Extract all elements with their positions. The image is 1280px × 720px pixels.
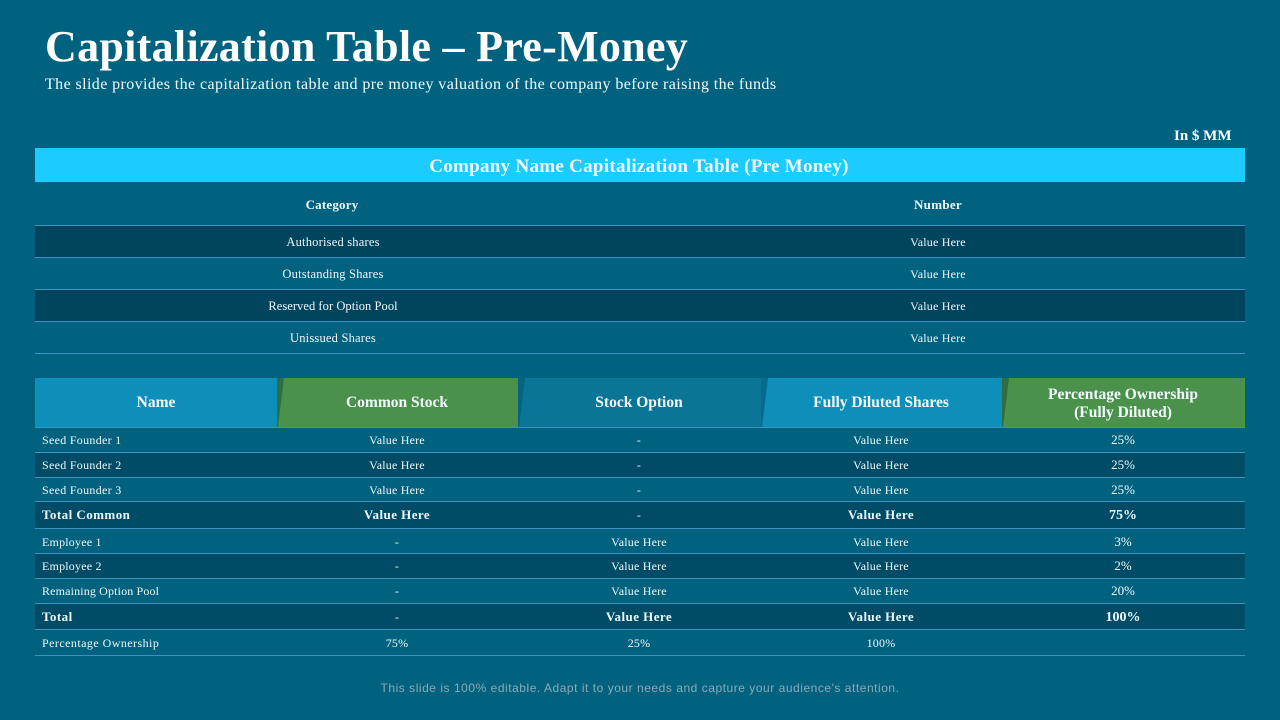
row: employee 1 xyxy=(35,529,1245,554)
panel: share summary table xyxy=(35,148,1245,354)
row: total common: Total Common xyxy=(42,507,130,522)
row: employee 1: - xyxy=(395,535,399,549)
row: authorised shares: Value Here xyxy=(910,235,966,249)
row: percentage ownership xyxy=(35,630,1245,656)
row: total common: 75% xyxy=(1109,508,1137,523)
row: percentage ownership: 25% xyxy=(628,636,650,650)
row: seed founder 1 xyxy=(35,427,1245,453)
row: employee 1: Value Here xyxy=(853,535,909,549)
row: total: Value Here xyxy=(606,609,672,624)
header cell: name xyxy=(35,378,277,427)
row: seed founder 3 xyxy=(35,478,1245,502)
row: employee 1: Value Here xyxy=(611,535,667,549)
header cell: name: Name xyxy=(137,394,175,411)
row: total common xyxy=(35,502,1245,529)
column heading: category: Category xyxy=(306,197,358,212)
row: percentage ownership: 75% xyxy=(386,636,408,650)
row: percentage ownership: 100% xyxy=(867,636,895,650)
row: employee 2: Employee 2 xyxy=(42,559,102,573)
row: unissued shares: Unissued Shares xyxy=(290,331,376,345)
row: seed founder 1: - xyxy=(637,433,641,447)
row: seed founder 3: Value Here xyxy=(853,483,909,497)
row: seed founder 1: Value Here xyxy=(853,433,909,447)
row: employee 2 xyxy=(35,554,1245,579)
header cell: percentage ownership: (Fully Diluted) xyxy=(1074,404,1172,421)
row: remaining option pool: - xyxy=(395,584,399,598)
row: percentage ownership: Percentage Ownership xyxy=(42,636,159,650)
header cell: percentage ownership: Percentage Ownership xyxy=(1048,386,1198,403)
title: Capitalization Table – Pre-Money xyxy=(45,22,688,71)
subtitle: The slide provides the capitalization table and pre money valuation of the company before raising the funds xyxy=(45,76,776,93)
row: employee 1: 3% xyxy=(1114,534,1132,549)
column heading: number: Number xyxy=(914,197,962,212)
row: remaining option pool xyxy=(35,579,1245,604)
header cell: fully diluted shares xyxy=(761,378,1002,427)
row: authorised shares xyxy=(35,226,1245,258)
row: outstanding shares xyxy=(35,258,1245,290)
footer note: This slide is 100% editable. Adapt it to your needs and capture your audience's attention. xyxy=(381,681,899,695)
row: unissued shares xyxy=(35,322,1245,354)
row: unissued shares: Value Here xyxy=(910,331,966,345)
row: outstanding shares: Outstanding Shares xyxy=(282,267,384,281)
row: employee 2: - xyxy=(395,559,399,573)
table title text: Company Name Capitalization Table (Pre Money) xyxy=(429,156,849,177)
row: outstanding shares: Value Here xyxy=(910,267,966,281)
header cell: fully diluted shares: Fully Diluted Shares xyxy=(813,394,949,411)
row: total: Total xyxy=(42,609,73,624)
row: seed founder 2: Value Here xyxy=(853,458,909,472)
row: seed founder 3: 25% xyxy=(1111,482,1135,497)
row: total common: Value Here xyxy=(364,507,430,522)
row: total: 100% xyxy=(1106,610,1140,625)
row: total xyxy=(35,604,1245,630)
panel: ownership table xyxy=(35,378,1245,656)
row: employee 1: Employee 1 xyxy=(42,535,102,549)
row: remaining option pool: Remaining Option Pool xyxy=(42,584,159,598)
row: total common: Value Here xyxy=(848,507,914,522)
header cell: common stock: Common Stock xyxy=(346,394,448,411)
row: seed founder 2: - xyxy=(637,458,641,472)
row: seed founder 2: Value Here xyxy=(369,458,425,472)
unit label: In $ MM xyxy=(1174,128,1232,144)
row: total: - xyxy=(395,610,399,624)
row: reserved for option pool xyxy=(35,290,1245,322)
row: total common: - xyxy=(637,508,641,522)
row: seed founder 1: Value Here xyxy=(369,433,425,447)
header cell: common stock xyxy=(277,378,518,427)
row: remaining option pool: Value Here xyxy=(611,584,667,598)
header cell: stock option: Stock Option xyxy=(595,394,683,411)
header cell: percentage ownership xyxy=(1002,378,1245,427)
row: seed founder 1: 25% xyxy=(1111,432,1135,447)
row: seed founder 1: Seed Founder 1 xyxy=(42,433,122,447)
header cell: stock option xyxy=(518,378,761,427)
row: seed founder 3: Seed Founder 3 xyxy=(42,483,122,497)
row: seed founder 2 xyxy=(35,453,1245,478)
table title banner xyxy=(35,148,1245,182)
row: total: Value Here xyxy=(848,609,914,624)
row: reserved for option pool: Reserved for Option Pool xyxy=(268,299,398,313)
row: employee 2: Value Here xyxy=(853,559,909,573)
row: seed founder 2: 25% xyxy=(1111,457,1135,472)
row: employee 2: 2% xyxy=(1114,558,1132,573)
row: reserved for option pool: Value Here xyxy=(910,299,966,313)
row: employee 2: Value Here xyxy=(611,559,667,573)
row: remaining option pool: Value Here xyxy=(853,584,909,598)
row: seed founder 3: Value Here xyxy=(369,483,425,497)
header row: category and number xyxy=(35,182,1245,226)
row: authorised shares: Authorised shares xyxy=(286,235,380,249)
row: remaining option pool: 20% xyxy=(1111,583,1135,598)
row: seed founder 2: Seed Founder 2 xyxy=(42,458,122,472)
row: seed founder 3: - xyxy=(637,483,641,497)
